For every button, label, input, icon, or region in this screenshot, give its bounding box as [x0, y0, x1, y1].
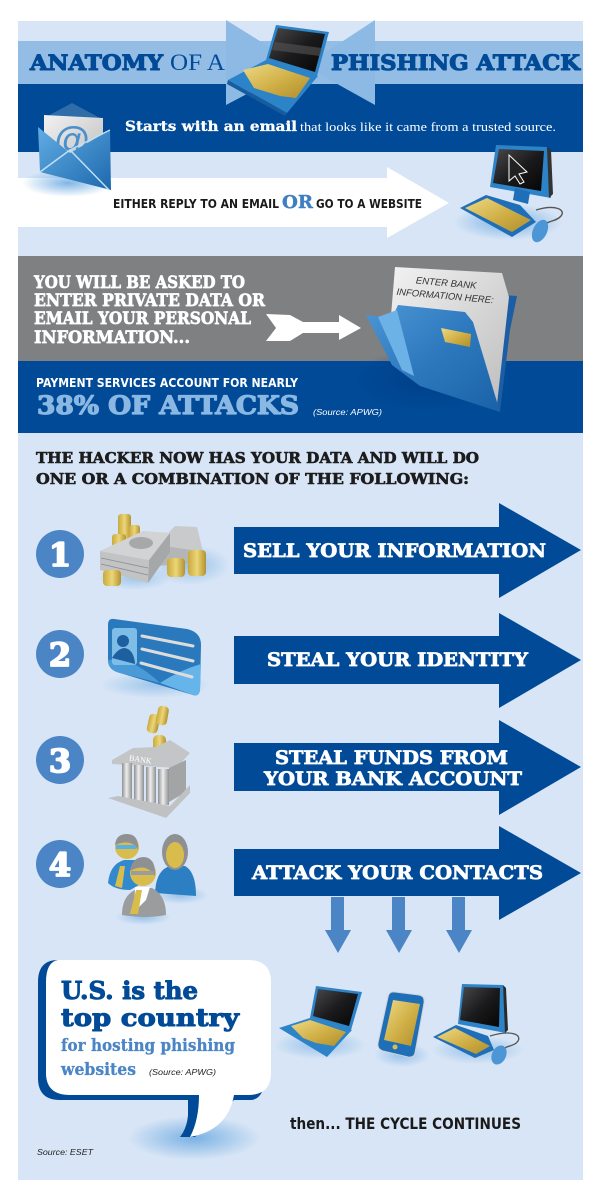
text: either reply [113, 192, 422, 213]
icon: bank with coins: BANK [128, 753, 153, 766]
label: SELL YOUR INFORMATION [243, 540, 546, 562]
label: STEAL FUNDS FROM [275, 747, 508, 769]
number badge 4: 4 [49, 846, 71, 884]
text: payment services: PAYMENT SERVICES ACCOUNT FOR NEARLY [36, 376, 298, 390]
text: you will be asked: INFORMATION... [34, 328, 190, 347]
text: you will be asked [33, 273, 265, 347]
title: PHISHING ATTACK [331, 50, 581, 75]
title: ANATOMY [29, 50, 164, 75]
number badge 1: 1 [49, 536, 71, 574]
label: STEAL YOUR IDENTITY [267, 649, 528, 671]
header band [18, 20, 583, 152]
arrow: attack your contacts [234, 826, 581, 920]
icon: email envelope [22, 103, 114, 197]
heading: hacker now has your data [36, 450, 479, 488]
icon: email envelope: @ [54, 119, 90, 160]
text: starts with an email: Starts with an email [125, 119, 297, 135]
step 2 [36, 613, 581, 708]
text: for hosting phishing websites: websites [60, 1060, 136, 1080]
arrow: steal funds [234, 720, 581, 815]
icon: desktop computer small [432, 984, 524, 1067]
panel: payment services [18, 361, 583, 433]
icon: money and coins [99, 514, 230, 590]
arrow: white reply arrow [18, 167, 449, 238]
label [263, 747, 522, 790]
heading: hacker now has your data: THE HACKER NOW HAS YOUR DATA AND WILL DO [36, 450, 479, 467]
number badge 1 [36, 530, 84, 578]
icon: bank with coins [108, 705, 190, 818]
text: you will be asked: EMAIL YOUR PERSONAL [34, 309, 251, 328]
stat: 38% of attacks: 38% OF ATTACKS [37, 391, 299, 420]
text: for hosting phishing websites: for hosting phishing [61, 1036, 235, 1056]
title [29, 50, 581, 75]
callout: speech bubble [38, 960, 271, 1160]
number badge 2 [36, 630, 84, 678]
text: for hosting phishing websites [60, 1036, 235, 1080]
text: starts with an email: that looks like it came from a trusted source. [300, 119, 556, 134]
icon: laptop [274, 986, 366, 1059]
step 3 [36, 705, 581, 818]
arrow: sell your information [234, 503, 581, 598]
text: U.S. is the top country [61, 976, 240, 1032]
text: either reply: EITHER REPLY TO AN EMAIL [113, 196, 279, 211]
step 4 [36, 826, 581, 925]
text: either reply: GO TO A WEBSITE [316, 196, 422, 211]
arrow: white feather arrow [266, 314, 361, 341]
text: U.S. is the top country: top country [61, 1003, 240, 1032]
arrow: steal your identity [234, 613, 581, 708]
label: YOUR BANK ACCOUNT [263, 768, 522, 790]
text: then the cycle continues: then... THE CYCLE CONTINUES [290, 1114, 521, 1133]
icon: folder with paper [353, 267, 517, 412]
number badge 4 [36, 840, 84, 888]
heading: hacker now has your data: ONE OR A COMBINATION OF THE FOLLOWING: [36, 471, 469, 488]
icon: id card [100, 619, 210, 698]
number badge 3 [36, 736, 84, 784]
text: you will be asked: ENTER PRIVATE DATA OR [34, 291, 265, 310]
icon: smartphone [374, 992, 430, 1067]
label: ATTACK YOUR CONTACTS [251, 862, 543, 884]
source: ESET: Source: ESET [37, 1147, 94, 1157]
arrows: three down arrows [325, 897, 472, 953]
number badge 2: 2 [49, 636, 71, 674]
text: you will be asked: YOU WILL BE ASKED TO [33, 273, 245, 292]
panel: private data [18, 256, 583, 361]
icon: folder with paper: INFORMATION HERE: [396, 287, 494, 306]
text: either reply: OR [282, 192, 314, 213]
text: U.S. is the top country: U.S. is the [61, 976, 198, 1005]
step 1 [36, 503, 581, 598]
source note: (Source: APWG) [313, 407, 382, 417]
icon: folder with paper: ENTER BANK [415, 275, 477, 292]
source note: (Source: APWG) [149, 1067, 216, 1077]
icon: people contacts [108, 834, 208, 925]
number badge 3: 3 [49, 742, 71, 780]
text: starts with an email [125, 119, 556, 135]
icon: laptop header [227, 25, 329, 116]
icon: desktop computer [454, 145, 562, 245]
title: OF A [170, 50, 225, 75]
